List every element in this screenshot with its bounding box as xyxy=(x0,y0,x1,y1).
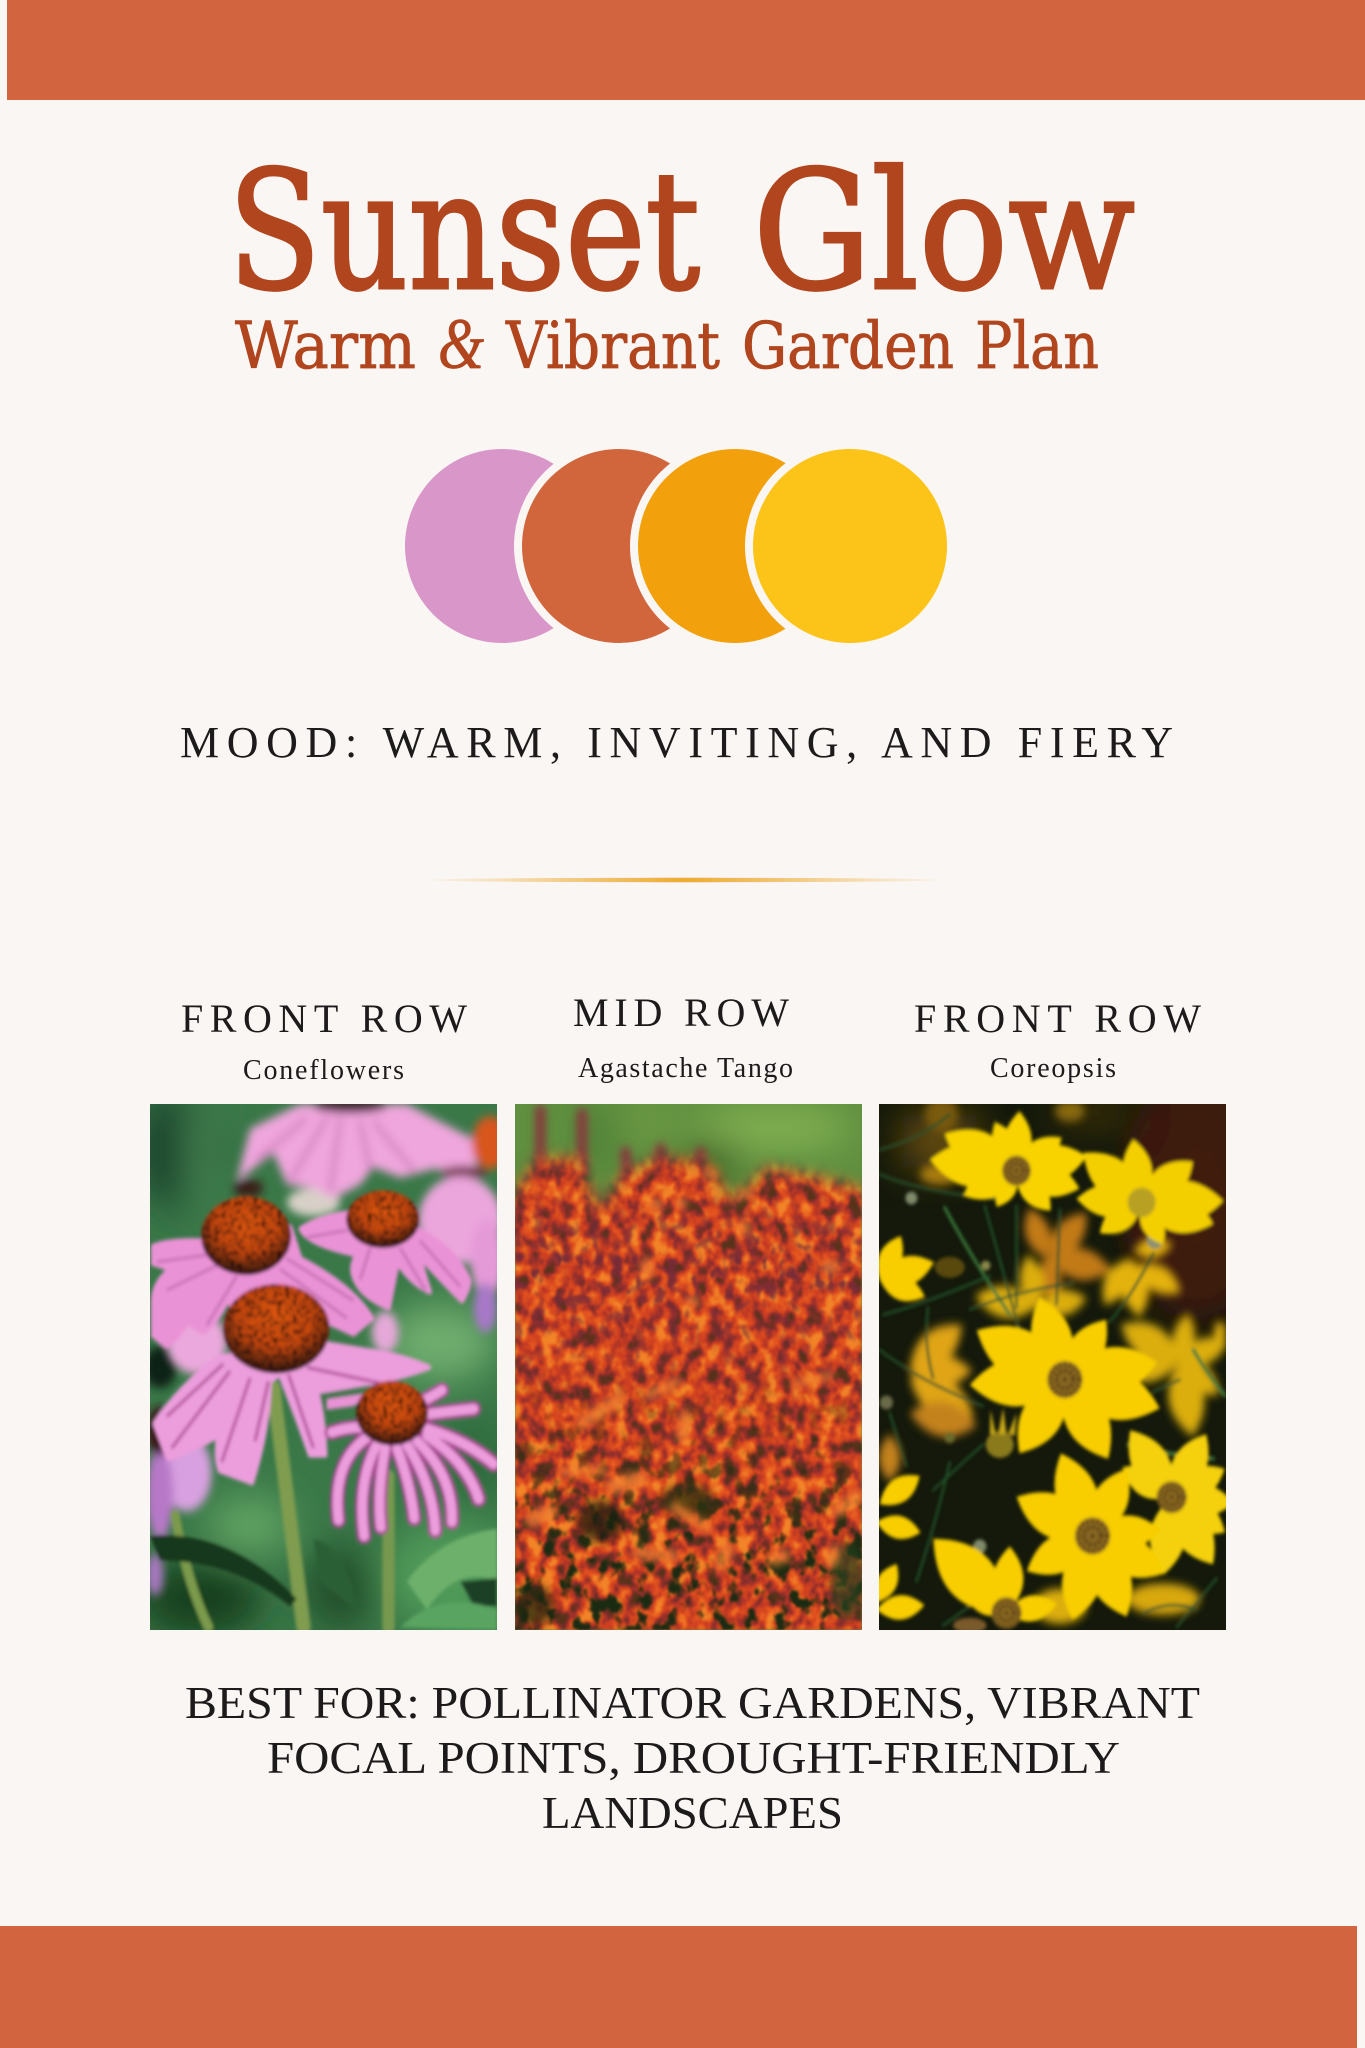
flower 5 lower right xyxy=(1115,1420,1235,1576)
background blurred flowers xyxy=(167,1099,509,1374)
mood line: MOOD: WARM, INVITING, AND FIERY xyxy=(180,718,1173,767)
column label: mid row agastache: MID ROW xyxy=(573,990,789,1035)
top banner xyxy=(7,0,1365,100)
best for text: FOCAL POINTS, DROUGHT-FRIENDLY xyxy=(267,1733,1120,1783)
best for text: LANDSCAPES xyxy=(542,1788,843,1838)
subtitle: Warm xyxy=(235,309,416,384)
top spikes xyxy=(540,1110,701,1195)
column label: front row coreopsis: FRONT ROW xyxy=(914,996,1201,1041)
flower 1 upper left xyxy=(927,1110,1090,1219)
lower left purple flower xyxy=(147,1406,212,1596)
subtitle: Garden xyxy=(742,309,954,384)
column label: mid row agastache xyxy=(573,990,793,1084)
small buds xyxy=(880,1192,1163,1553)
colour palette circles xyxy=(405,441,955,651)
flower 4 lower centre xyxy=(1008,1445,1172,1625)
column label: front row coneflowers: FRONT ROW xyxy=(181,996,467,1041)
flower B xyxy=(301,1213,469,1308)
flower 3 centre xyxy=(965,1291,1166,1470)
maroon shading upper half xyxy=(515,1189,862,1408)
orange highlights xyxy=(532,1174,857,1563)
column label: front row coneflowers xyxy=(181,996,467,1086)
subtitle: Vibrant xyxy=(505,309,720,384)
flower A xyxy=(153,1227,372,1346)
flower C xyxy=(155,1343,429,1483)
best for text: BEST FOR: POLLINATOR GARDENS, VIBRANT xyxy=(185,1678,1200,1728)
flower spikes xyxy=(515,1104,862,1630)
column label: front row coneflowers: Coneflowers xyxy=(243,1055,404,1086)
green stems xyxy=(880,1115,1225,1627)
subtitle: & xyxy=(438,304,484,384)
column label: front row coreopsis xyxy=(914,996,1201,1084)
out of focus orange and amber flowers xyxy=(879,1097,1232,1624)
column label: mid row agastache: Agastache Tango xyxy=(578,1053,793,1084)
photo: coreopsis xyxy=(879,1104,1226,1630)
flower D xyxy=(332,1390,494,1536)
subtitle: Plan xyxy=(975,309,1099,384)
best for text xyxy=(185,1678,1200,1838)
title: Sunset xyxy=(228,136,700,327)
flower 2 upper right xyxy=(1072,1137,1224,1250)
left edge petals xyxy=(867,1231,938,1622)
photo: agastache xyxy=(515,1104,862,1630)
bottom banner xyxy=(0,1926,1357,2048)
stems and leaves xyxy=(175,1388,389,1627)
dark foliage lower half xyxy=(515,1374,862,1630)
column label: front row coreopsis: Coreopsis xyxy=(990,1053,1116,1084)
photo: coneflowers xyxy=(150,1104,497,1630)
title: Glow xyxy=(753,136,1135,327)
flower 6 bottom xyxy=(916,1520,1059,1633)
